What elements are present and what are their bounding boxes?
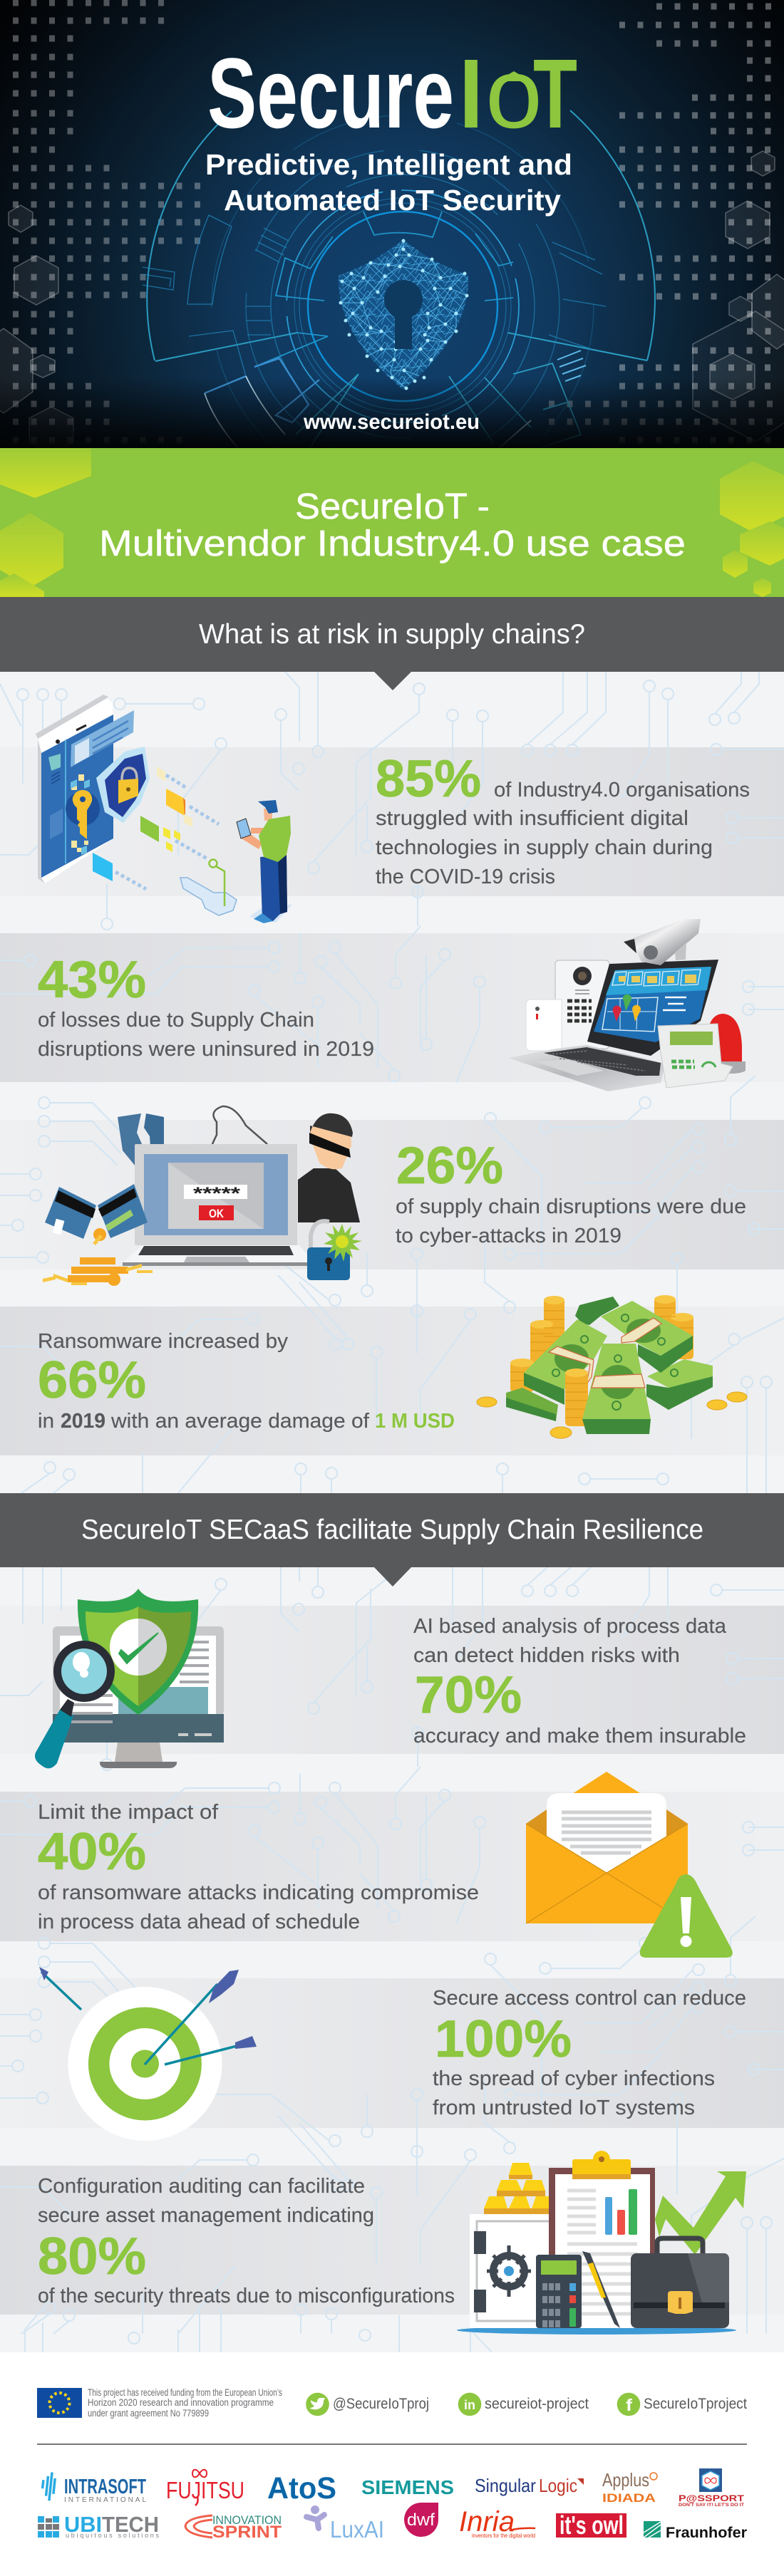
- logo: Intrasoft: INTERNATIONAL: [64, 2496, 146, 2504]
- text block: 40%: Limit the impact of: [38, 1801, 218, 1824]
- social: linkedin: [458, 2393, 589, 2416]
- logo: Fujitsu: FUJITSU: [166, 2477, 244, 2503]
- arrows: [41, 1972, 242, 2065]
- text block: ransomware 66%: 2019: [61, 1410, 105, 1433]
- text block: 80%: of the security threats due to misconfigurations: [38, 2285, 455, 2307]
- social: facebook: [617, 2393, 747, 2416]
- envelope flap: [526, 1772, 688, 1852]
- panel: heading what is at risk: [0, 597, 784, 690]
- logo: dwf: [404, 2503, 438, 2537]
- logo: Innovation Sprint: [185, 2513, 282, 2542]
- panel: light circuit background: [0, 672, 784, 2352]
- logo: Inria: inventors for the digital world: [472, 2532, 535, 2539]
- thief: [298, 1168, 360, 1222]
- logo: Passport: [679, 2468, 745, 2508]
- social: facebook: SecureIoTproject: [644, 2396, 747, 2412]
- heading text: [99, 486, 686, 564]
- subtitle: [205, 148, 572, 217]
- logo: SingularLogic: Singular: [475, 2475, 536, 2496]
- digital dot grid right: [549, 6, 775, 440]
- wordmark IoT: o: [485, 37, 542, 149]
- illustration: phone security and user: [36, 695, 292, 923]
- social: linkedin: secureiot-project: [485, 2396, 589, 2412]
- text block: 70%: 70%: [415, 1666, 522, 1724]
- text block: 100%: the spread of cyber infections: [433, 2067, 715, 2090]
- logo: Ubitech: UBI: [64, 2512, 102, 2537]
- wordmark IoT: [459, 37, 577, 149]
- monitor: [53, 1626, 224, 1715]
- text block: 70%: can detect hidden risks with: [413, 1644, 680, 1667]
- social: twitter: @SecureIoTproj: [333, 2396, 429, 2412]
- wordmark Secure: Secure: [207, 37, 454, 149]
- logo: its owl: it's owl: [559, 2510, 624, 2540]
- growth arrow: [655, 2171, 746, 2255]
- text block: 100%: from untrusted IoT systems: [433, 2097, 695, 2119]
- OK button: [199, 1205, 234, 1220]
- website url: www.secureiot.eu: [303, 410, 480, 434]
- icon: network shield with keyhole: [339, 240, 468, 390]
- text block: 100%: Secure access control can reduce: [433, 1987, 746, 2010]
- text block: 85%: technologies in supply chain during: [376, 836, 713, 859]
- warning triangle: [640, 1874, 733, 1958]
- briefcase: [657, 2238, 703, 2253]
- pen: [582, 2251, 620, 2328]
- text block: 70%: [413, 1615, 746, 1747]
- text block: 100%: 100%: [435, 2010, 572, 2068]
- app tiles: [48, 754, 61, 771]
- panel: header banner: [0, 0, 784, 497]
- data cubes: [166, 789, 185, 816]
- logo: Ubitech: ubiquitous solutions: [66, 2532, 159, 2539]
- gold key: [66, 791, 100, 826]
- base shadow: [457, 2326, 736, 2334]
- funding statement: This project has received funding from the European Union’s: [88, 2387, 282, 2398]
- text block: 80%: Configuration auditing can facilitate: [38, 2175, 365, 2198]
- text block: 40%: [38, 1801, 479, 1933]
- cctv camera: [624, 919, 701, 965]
- safe: [470, 2214, 555, 2328]
- text block: 40%: 40%: [38, 1823, 146, 1881]
- laptop base: [508, 1045, 665, 1091]
- shield and padlock: [96, 747, 150, 823]
- coin stacks: [510, 1297, 693, 1392]
- logo: Intrasoft: INTRASOFT: [64, 2476, 146, 2498]
- logo: Innovation Sprint: SPRINT: [212, 2523, 282, 2542]
- text block: ransomware 66%: 1 M USD: [375, 1410, 455, 1433]
- text block: ransomware 66%: with an average damage of: [110, 1410, 369, 1433]
- gold bars: [484, 2163, 550, 2208]
- logo: SingularLogic: [475, 2475, 584, 2496]
- fishing hook: [207, 1106, 267, 1161]
- text block: 40%: of ransomware attacks indicating compromise: [38, 1881, 479, 1904]
- text block: 85%: the COVID-19 crisis: [376, 866, 555, 888]
- logo: dwf: dwf: [407, 2510, 435, 2530]
- illustration: envelope with warning: [526, 1772, 733, 1958]
- illustration: phishing attack: [43, 1106, 362, 1286]
- title: SecureIoT logo: [207, 37, 577, 149]
- gear: [493, 2255, 525, 2287]
- logo: Inria: [459, 2506, 535, 2539]
- wordmark IoT: I: [459, 39, 483, 149]
- logo: Passport: DON'T SAY IT! LET'S DO IT: [679, 2503, 744, 2508]
- text block: ransomware 66%: in: [38, 1410, 54, 1433]
- panel: green title band: [0, 448, 784, 597]
- text block: ransomware 66%: [38, 1330, 455, 1433]
- credit cards: [45, 1187, 96, 1239]
- text block: 26%: to cyber-attacks in 2019: [396, 1225, 621, 1247]
- text block: 85%: of Industry4.0 organisations: [494, 779, 750, 801]
- text block: 70%: AI based analysis of process data: [413, 1615, 726, 1638]
- logo: Fujitsu: [166, 2470, 244, 2505]
- logo: LuxAI: [306, 2505, 384, 2543]
- loose coins: [477, 1392, 747, 1438]
- logo: Fraunhofer: Fraunhofer: [666, 2525, 747, 2541]
- heading text: What is at risk in supply chains?: [199, 619, 585, 650]
- wordmark IoT: T: [533, 39, 577, 149]
- ground key: [180, 878, 237, 915]
- logo: SingularLogic: Logic: [539, 2475, 577, 2496]
- logo: Ubitech: [38, 2512, 159, 2539]
- broken shield: [118, 1113, 143, 1166]
- impact burst: [324, 1224, 362, 1262]
- laptop base: [123, 1245, 314, 1262]
- laptop: [135, 1144, 297, 1245]
- arrow pointer: [374, 1567, 411, 1586]
- heading text: Multivendor Industry4.0 use case: [99, 523, 686, 564]
- person: [249, 905, 292, 923]
- text block: 80%: secure asset management indicating: [38, 2204, 374, 2227]
- logo: Atos: AtoS: [267, 2471, 336, 2505]
- text block: 70%: accuracy and make them insurable: [413, 1725, 746, 1747]
- padlock: [311, 1221, 329, 1250]
- check mark: [119, 1633, 158, 1663]
- logo: Siemens: SIEMENS: [361, 2476, 454, 2498]
- funding statement: Horizon 2020 research and innovation programme: [88, 2397, 274, 2408]
- door station: [555, 960, 609, 1049]
- text block: ransomware 66%: 66%: [38, 1351, 146, 1409]
- text block: 100%: [433, 1987, 746, 2119]
- logo: Inria: Inria: [459, 2506, 515, 2538]
- decorative hexagons: [0, 448, 784, 597]
- text block: 80%: 80%: [38, 2228, 146, 2285]
- text block: 43%: disruptions were uninsured in 2019: [38, 1038, 374, 1061]
- funding statement: under grant agreement No 779899: [88, 2408, 209, 2419]
- heading text: SecureIoT SECaaS facilitate Supply Chain Resilience: [81, 1515, 703, 1545]
- logo: Applus IDIADA: IDIADA: [602, 2491, 656, 2505]
- logo: Innovation Sprint: INNOVATION: [212, 2513, 282, 2527]
- panel: footer: [0, 2352, 784, 2576]
- text block: 80%: [38, 2175, 455, 2307]
- text block: 43%: [38, 951, 374, 1061]
- text block: 26%: 26%: [396, 1137, 503, 1195]
- logo: LuxAI: LuxAI: [330, 2516, 384, 2543]
- social: facebook: f: [626, 2396, 632, 2414]
- text block: 43%: of losses due to Supply Chain: [38, 1009, 314, 1032]
- illustration: monitor shield and magnifier: [35, 1589, 224, 1768]
- bar chart: [605, 2197, 612, 2235]
- translucent hexagons: [0, 151, 784, 454]
- HUD rings: [143, 110, 655, 497]
- icon: EU flag: [37, 2388, 82, 2418]
- heading text: SecureIoT -: [295, 486, 490, 526]
- clipboard: [549, 2168, 655, 2328]
- phone: [38, 698, 113, 883]
- password field: [184, 1185, 247, 1199]
- profile card: [71, 710, 134, 767]
- logo: Applus IDIADA: [602, 2469, 657, 2505]
- text block: 43%: 43%: [38, 951, 146, 1009]
- illustration: money and coins: [477, 1295, 747, 1438]
- text block: 26%: of supply chain disruptions were due: [396, 1195, 746, 1218]
- laptop lid: [587, 960, 718, 1056]
- text block: 40%: in process data ahead of schedule: [38, 1911, 360, 1933]
- logo: Applus IDIADA: Applus: [602, 2469, 649, 2491]
- envelope front: [526, 1824, 688, 1923]
- logo: Fraunhofer: [644, 2521, 747, 2541]
- password stars: *****: [193, 1184, 241, 1203]
- text block: 85%: 85%: [376, 750, 481, 808]
- logo: Intrasoft: [41, 2471, 146, 2504]
- coins: [43, 1228, 153, 1286]
- subtitle: Predictive, Intelligent and: [205, 148, 572, 181]
- OK label: OK: [209, 1207, 225, 1220]
- calculator: [536, 2255, 582, 2328]
- digital dot grid left: [13, 3, 209, 440]
- social: linkedin: in: [464, 2398, 475, 2412]
- siren: [707, 1014, 742, 1063]
- illustration: target with arrows: [39, 1967, 257, 2141]
- bill piles: [575, 1297, 619, 1325]
- social: twitter: [306, 2393, 429, 2416]
- logo: Passport: P@SSPORT: [679, 2493, 745, 2503]
- keypad: [658, 1024, 733, 1088]
- subtitle: Automated IoT Security: [224, 184, 561, 217]
- magnifier: [35, 1710, 73, 1768]
- motion sensor: [526, 999, 562, 1051]
- letter: [547, 1793, 666, 1874]
- text block: 85%: [376, 750, 750, 888]
- shield: [78, 1589, 198, 1715]
- illustration: safe clipboard briefcase: [457, 2151, 746, 2334]
- arrow pointer: [374, 672, 411, 690]
- text block: 26%: [396, 1137, 746, 1247]
- illustration: smart home security devices: [508, 919, 746, 1091]
- text block: ransomware 66%: Ransomware increased by: [38, 1330, 289, 1353]
- panel: heading SECaaS: [0, 1493, 784, 1586]
- funding statement: [88, 2387, 282, 2419]
- logo: Ubitech: TECH: [102, 2512, 159, 2537]
- text block: 85%: struggled with insufficient digital: [376, 807, 688, 830]
